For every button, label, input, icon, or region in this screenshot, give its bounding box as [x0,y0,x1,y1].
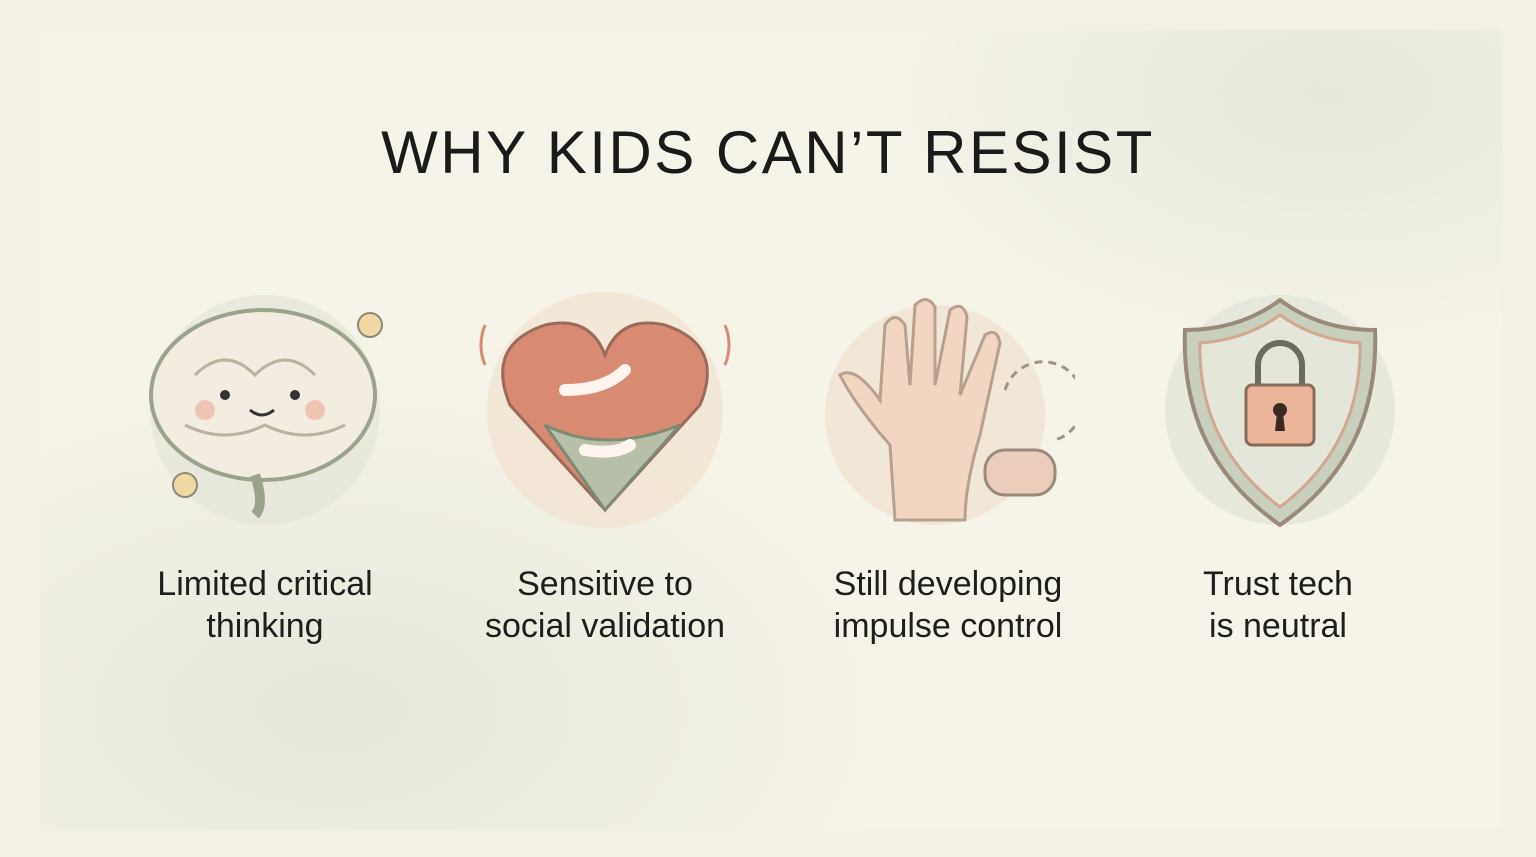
icon: brain [149,295,383,518]
label: sensitive to social validation: Sensitive to [517,565,693,603]
label: still developing impulse control: Still developing [834,565,1062,603]
label: limited critical thinking: Limited critical [157,565,373,603]
title: WHY KIDS CAN’T RESIST [381,119,1155,186]
icon: shield with lock [1165,295,1395,528]
label: limited critical thinking [157,565,373,645]
icon: heart hug [480,292,730,528]
label: still developing impulse control [834,565,1062,645]
icon: hand with controller [825,298,1075,525]
label: sensitive to social validation: social validation [485,607,725,645]
label: trust tech is neutral [1203,565,1353,645]
label: limited critical thinking: thinking [206,607,324,645]
label: sensitive to social validation [485,565,725,645]
label: trust tech is neutral: Trust tech [1203,565,1353,603]
label: trust tech is neutral: is neutral [1209,607,1347,645]
label: still developing impulse control: impulse control [834,607,1062,645]
